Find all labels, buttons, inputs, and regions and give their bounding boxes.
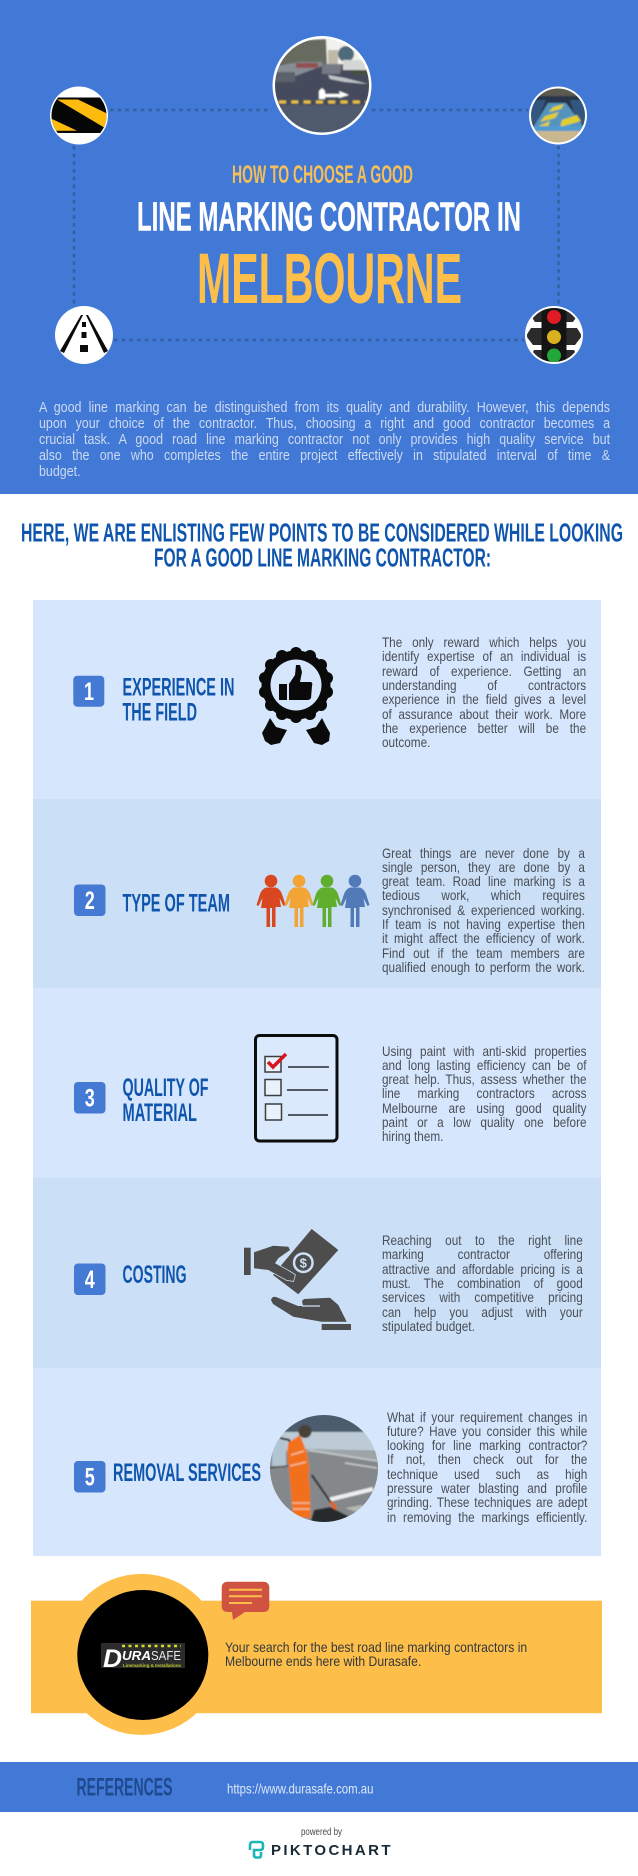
- text: removal: grinding. These techniques are adept: [387, 1494, 587, 1510]
- number badge 5: 5: [85, 1463, 95, 1491]
- text: experience: identify expertise of an individual is: [382, 648, 586, 664]
- text: closing: Your search for the best road line marking contractors in: [224, 1638, 527, 1654]
- logo: Durasafe: [101, 1643, 185, 1673]
- panel: header: [0, 0, 638, 494]
- intro paragraph: A good line marking can be distinguished from its quality and durability. However, this depends: [38, 399, 610, 416]
- icon: hazard stripes: [50, 86, 108, 144]
- heading: quality of material: MATERIAL: [122, 1099, 197, 1127]
- text: material: and long lasting efficiency can be of: [382, 1057, 587, 1073]
- text: experience: reward of experience. Getting an: [382, 663, 586, 679]
- text: costing: [382, 1232, 583, 1334]
- text: removal: technique used such as high: [387, 1466, 587, 1482]
- text: closing: Melbourne ends here with Durasafe.: [224, 1653, 421, 1669]
- Piktochart wordmark: PIKTOCHART: [271, 1842, 390, 1859]
- text: removal: What if your requirement changes in: [387, 1408, 587, 1424]
- intro paragraph: budget.: [38, 463, 80, 480]
- text: team: Find out if the team members are: [382, 945, 585, 961]
- number badge 1: 1: [84, 677, 94, 706]
- photo: road with arrow: [272, 36, 372, 136]
- text: team: synchronised & experienced working.: [382, 902, 585, 918]
- text: removal: If not, then check out for the: [387, 1451, 587, 1467]
- number badge 5: [74, 1461, 106, 1492]
- text: costing: Reaching out to the right line: [382, 1232, 583, 1248]
- text: material: Using paint with anti-skid properties: [382, 1042, 587, 1058]
- text: removal: pressure water blasting and profile: [387, 1480, 587, 1496]
- text: costing: must. The combination of good: [382, 1275, 583, 1291]
- title line 1: HOW TO CHOOSE A GOOD: [232, 161, 413, 189]
- text: experience: outcome.: [382, 734, 430, 750]
- text: costing: services with competitive pricing: [382, 1289, 583, 1305]
- photo: car park marking: [529, 86, 587, 146]
- panel: costing: [33, 1178, 601, 1368]
- text: costing: marking contractor offering: [382, 1246, 583, 1262]
- text: removal: [387, 1408, 588, 1525]
- text: costing: stipulated budget.: [382, 1318, 475, 1334]
- icon: Piktochart mark: [250, 1842, 263, 1858]
- yellow band: [31, 1601, 602, 1713]
- icon: award rosette with thumb: [259, 647, 333, 745]
- heading: experience in the field: THE FIELD: [122, 699, 197, 727]
- footer: powered by Piktochart: [248, 1827, 390, 1859]
- intro paragraph: upon your choice of the contractor. Thus, choosing a right and good contractor becomes a: [38, 415, 610, 432]
- title: [137, 161, 521, 319]
- text: team: it might affect the efficiency of work.: [382, 930, 585, 946]
- text: experience: the experience better will be the: [382, 720, 586, 736]
- heading: experience in the field: EXPERIENCE IN: [122, 674, 234, 702]
- text: costing: attractive and affordable pricing is a: [382, 1261, 583, 1277]
- text: material: great help. Thus, assess whether the: [382, 1071, 587, 1087]
- text: material: paint or a low quality one before: [382, 1114, 587, 1130]
- number badge 4: 4: [85, 1265, 95, 1294]
- number badge 2: [74, 884, 106, 916]
- text: team: If team is not having expertise then: [382, 916, 585, 932]
- number badge 4: [74, 1264, 106, 1295]
- logo: Durasafe: D: [103, 1645, 122, 1673]
- intro paragraph: [38, 399, 610, 480]
- panel: references: [0, 1762, 638, 1812]
- text: experience: experience in the field gives a level: [382, 691, 586, 707]
- icon: hands exchanging money: $: [300, 1256, 308, 1270]
- heading: references: REFERENCES: [76, 1773, 172, 1801]
- text: material: line marking contractors across: [382, 1085, 587, 1101]
- logo: Durasafe: URA: [122, 1648, 151, 1663]
- panel: removal services: [33, 1368, 601, 1556]
- text: closing: [224, 1638, 527, 1669]
- number badge 3: [74, 1082, 106, 1114]
- panel: quality of material: [33, 988, 601, 1178]
- text: removal: future? Have you consider this while: [387, 1423, 587, 1439]
- logo circle backing: [61, 1574, 222, 1735]
- logo: Durasafe: SAFE: [151, 1648, 181, 1663]
- panel: closing callout: [31, 1574, 602, 1735]
- intro paragraph: crucial task. A good road line marking contractor not only provides high quality service but: [38, 431, 610, 448]
- text: material: Melbourne are using good quality: [382, 1100, 587, 1116]
- heading: experience in the field: [122, 674, 234, 727]
- heading: costing: COSTING: [122, 1261, 186, 1289]
- icon: four people: [256, 875, 370, 927]
- number badge 1: [73, 676, 104, 707]
- text: team: Great things are never done by a: [382, 844, 585, 860]
- number badge 3: 3: [85, 1084, 95, 1112]
- icon: checklist: [256, 1036, 337, 1141]
- text: removal: looking for line marking contractor?: [387, 1437, 587, 1453]
- text: team: single person, they are done by a: [382, 859, 585, 875]
- logo: Durasafe: Linemarking & Installations: [123, 1663, 181, 1668]
- icon: hands exchanging money: [244, 1229, 351, 1330]
- text: material: [382, 1042, 587, 1144]
- number badge 2: 2: [85, 886, 95, 915]
- icon: speech bubble: [222, 1582, 269, 1620]
- heading: quality of material: QUALITY OF: [122, 1074, 208, 1102]
- text: removal: in removing the markings efficiently.: [387, 1509, 587, 1525]
- intro paragraph: also the one who completes the entire project effectively in stipulated interval of time &: [38, 447, 610, 464]
- text: team: tedious work, which requires: [382, 887, 585, 903]
- icon: road: [55, 306, 113, 364]
- text: experience: of assurance about their work. More: [382, 706, 586, 722]
- panel: type of team: [33, 799, 601, 988]
- text: experience: [382, 634, 586, 750]
- text: team: great team. Road line marking is a: [382, 873, 585, 889]
- text: material: hiring them.: [382, 1128, 443, 1144]
- powered by label: powered by: [301, 1827, 342, 1838]
- heading: removal services: REMOVAL SERVICES: [113, 1459, 261, 1487]
- text: experience: The only reward which helps you: [382, 634, 586, 650]
- black logo circle: [77, 1590, 208, 1720]
- panel: experience in the field: [33, 600, 601, 799]
- text: team: qualified enough to perform the work.: [382, 959, 585, 975]
- section heading: [21, 518, 623, 573]
- photo: worker removing line markings: [268, 1413, 380, 1525]
- heading: type of team: TYPE OF TEAM: [122, 890, 230, 918]
- text: experience: understanding of contractors: [382, 677, 586, 693]
- link text: https://www.durasafe.com.au: [227, 1780, 374, 1796]
- text: team: [382, 844, 585, 975]
- heading: quality of material: [122, 1074, 208, 1127]
- text: costing: can help you adjust with your: [382, 1304, 583, 1320]
- icon: traffic light: [525, 306, 583, 366]
